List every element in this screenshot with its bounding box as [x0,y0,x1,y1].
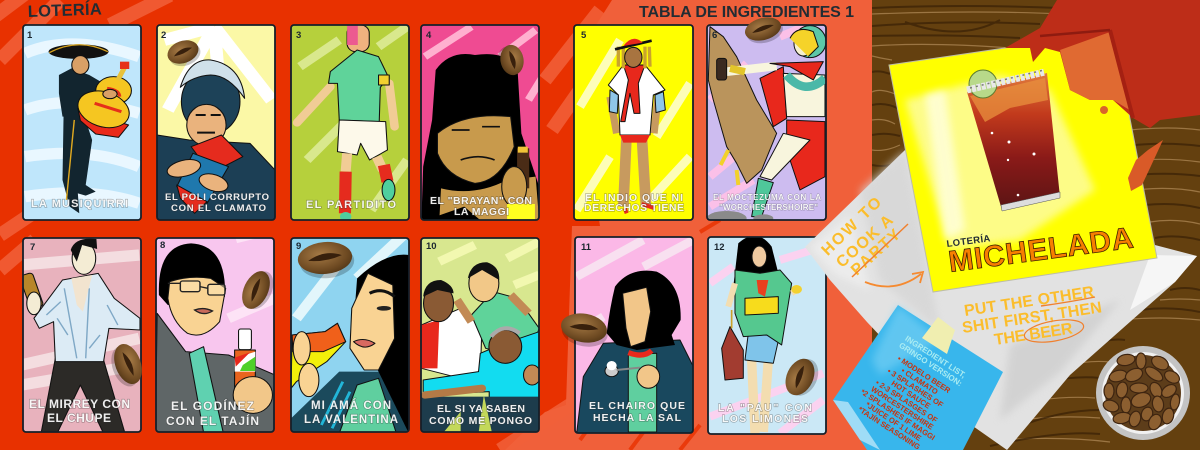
caption: LA VALENTINA [304,414,398,426]
blue ingredient note: HOT SAUCE [890,379,932,411]
wood table background [860,0,1200,450]
caption [718,402,812,425]
icon: bowl of coffee beans [1096,346,1190,440]
caption: EL CHUPE [47,411,111,425]
how to cook a party note: PARTY [848,226,904,279]
how to cook a party note [819,194,923,286]
card 2: El poli corrupto con el clamato [157,25,275,220]
card 6: El Moctezuma con la Worchestershoire [707,13,826,226]
caption: EL POLI CORRUPTO [165,192,269,203]
card frame [156,238,274,432]
caption: COMO ME PONGO [429,415,532,427]
lighter painted area, right board [505,0,872,450]
illustration: football player [297,25,407,221]
card 5: El indio que ni derechos tiene: 5 [581,30,587,41]
card 10: El si ya saben como me pongo [421,238,541,433]
beer instruction note: THE BEER [993,320,1074,349]
card frame [574,25,693,220]
caption: EL PARTIDITO [306,199,396,211]
card frame [157,25,275,220]
bean [106,340,147,390]
bean [164,36,204,71]
caption: CON EL TAJÍN [166,413,259,428]
napkin [805,150,1197,450]
caption: EL MOCTEZUMA CON LA [713,193,821,202]
caption: EL "BRAYAN" CON [430,195,532,207]
caption [429,403,532,427]
caption: "WORCHESTERSHOIRE" [719,203,818,212]
illustration: three friends [421,242,541,433]
card 1: La Musiquirri [23,25,141,220]
how to cook a party note: HOW TO [819,194,885,259]
michelada title: MICHELADA [947,222,1135,279]
illustration: long-haired man with bottle [421,27,543,222]
caption: LA "PAU" CON [718,402,812,414]
blue ingredient note [833,305,1003,450]
caption [430,195,532,218]
card 9: Mi amá con la Valentina: 9 [296,241,301,252]
beer instruction note: SHIT FIRST, THEN [961,299,1103,337]
card 10: El si ya saben como me pongo: 10 [426,241,437,252]
caption: EL GODÍNEZ [171,398,254,413]
blue ingredient note: • CLAMATO [899,366,940,396]
caption: EL SI YA SABEN [437,403,525,415]
arrow [865,272,923,286]
caption: DERECHOS TIENE [584,202,684,214]
blue ingredient note: • 2-3 SPLASGES OF [874,378,939,425]
caption [304,399,398,426]
caption [584,192,684,214]
illustration: indigenous man in white tunic [577,39,690,213]
bean [297,240,356,281]
caption [589,400,685,424]
heading: Tabla de ingredientes 1: TABLA DE INGREDIENTES 1 [639,4,854,21]
card 2: El poli corrupto con el clamato: 2 [161,30,166,41]
caption [29,397,130,425]
blue ingredient note: WORCESTERSHIRE [869,385,935,432]
caption: EL CHAIRO QUE [589,400,685,412]
card 3: El partidito [291,25,409,221]
illustration: Aztec warrior and eagle [707,20,826,226]
heading: Lotería: LOTERÍA [27,0,102,21]
caption: EL INDIO QUE NI [585,192,683,204]
caption: HECHA LA SAL [593,412,682,424]
caption: LA MAGGI [454,206,509,218]
tape [922,317,955,354]
card 12: La Pau con los limones: 12 [714,242,725,253]
card 1: La Musiquirri: 1 [27,30,33,41]
caption: CON EL CLAMATO [171,203,266,214]
caption [713,193,821,212]
how to cook a party note: COOK A [833,212,897,271]
card 4: El Brayan con la Maggi: 4 [426,30,432,41]
bean [237,266,279,315]
blue ingredient note: • MODELO BEER [896,354,953,395]
card frame [575,237,693,433]
caption [165,192,269,214]
caption: EL MIRREY CON [29,397,130,411]
card 4: El Brayan con la Maggi [421,25,543,222]
blue ingredient note: • 3 SPLASHES OF [886,367,945,410]
illustration: riot policeman hugging a bottle [157,27,275,220]
card frame [23,238,141,432]
red lotería board [0,0,872,450]
card frame [708,237,826,434]
blue ingredient note: *JUICE OF 1 LIME [864,400,923,443]
bean [495,43,526,78]
card frame [421,25,539,220]
red splash [1005,0,1200,128]
card 8: El godínez con el tajín: 8 [160,240,165,251]
illustration: woman in green jacket with lemons [710,236,823,433]
card 11: El chairo que hecha la sal [558,237,693,433]
bean [558,310,611,350]
caption: MI AMÁ CON [311,399,391,412]
illustration: mariachi with guitar [25,44,139,213]
illustration: man with open shirt and bottle [19,239,140,433]
yellow lotería michelada card [889,0,1200,292]
card frame [421,238,539,432]
card 5: El indio que ni derechos tiene [574,25,693,220]
card 6: El Moctezuma con la Worchestershoire: 6 [712,30,717,41]
icon: michelada glass [967,70,1060,211]
lotería label: LOTERÍA [946,233,991,250]
card 7: El mirrey con el chupe [19,238,147,433]
bean [742,13,786,47]
caption: LA MUSIQUIRRI [31,198,128,210]
blue ingredient note: GRINGO VERSION: [897,341,964,388]
card 7: El mirrey con el chupe: 7 [30,242,35,253]
card 8: El godínez con el tajín [155,228,279,433]
card frame [291,238,409,432]
blue ingredient note: INGREDIENT LIST, [903,334,967,380]
card 11: El chairo que hecha la sal: 11 [581,242,592,253]
illustration: long-haired man with spoon of salt [577,240,693,433]
card 12: La Pau con los limones [708,236,826,434]
card frame [707,25,826,220]
illustration: woman drinking hot sauce [291,235,409,433]
beer instruction note: PUT THE OTHER [963,284,1096,320]
card frame [23,25,141,220]
caption: LOS LIMONES [722,413,808,425]
bean [780,353,824,402]
card frame [291,25,409,220]
card 9: Mi amá con la Valentina [291,235,409,433]
beer instruction note [961,284,1103,349]
illustration: office worker with Tajín bottle [155,228,275,433]
caption [166,398,259,428]
card 3: El partidito: 3 [296,30,301,41]
blue ingredient note: *2 SPLASHES IF MAGGI [859,387,937,442]
